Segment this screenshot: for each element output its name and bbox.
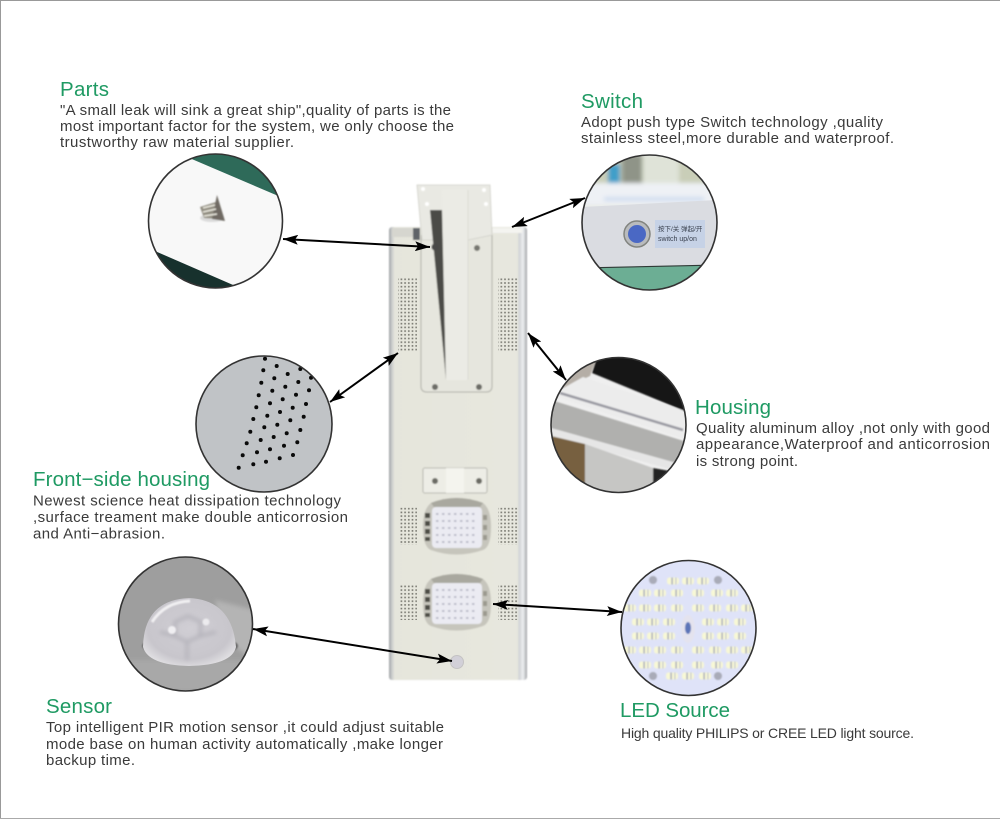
- text block: sensor: Sensor: [46, 695, 112, 718]
- arrow: switch: [512, 198, 585, 227]
- circle: front-side housing vent photo: [196, 356, 332, 492]
- text block: housing: [695, 396, 990, 470]
- text block: sensor: mode base on human activity automatically ,make longer: [46, 736, 443, 753]
- text block: switch: [581, 90, 894, 147]
- text block: housing: Housing: [695, 396, 771, 419]
- arrow: sensor: [253, 629, 452, 661]
- lamp body: [389, 227, 527, 680]
- circle: switch photo: switch up/on: [658, 236, 697, 243]
- text block: sensor: Top intelligent PIR motion sensor ,it could adjust suitable: [46, 719, 444, 736]
- text block: LED source: LED Source: [620, 699, 730, 722]
- solar street light product: [389, 185, 527, 680]
- text block: housing: Quality aluminum alloy ,not only with good: [696, 420, 990, 437]
- arrow: LED source: [493, 604, 622, 612]
- sensor dome: [450, 656, 464, 668]
- text block: parts: most important factor for the system, we only choose the: [60, 118, 454, 135]
- text block: sensor: backup time.: [46, 752, 135, 769]
- text block: LED source: [620, 699, 914, 741]
- text block: parts: trustworthy raw material supplier.: [60, 134, 294, 151]
- text block: front-side housing: Newest science heat dissipation technology: [33, 492, 342, 510]
- text block: sensor: [46, 695, 444, 769]
- circle: parts screw photo: [148, 154, 283, 288]
- text block: parts: Parts: [60, 78, 109, 101]
- text block: switch: Adopt push type Switch technology ,quality: [581, 114, 884, 131]
- text block: front-side housing: [33, 468, 348, 542]
- circle: PIR sensor photo: [118, 557, 254, 691]
- vent holes: [398, 277, 518, 620]
- circle: housing aluminium photo: [551, 357, 687, 493]
- circle: switch photo: 按下/关 弹起/开: [658, 224, 703, 233]
- circle: switch photo: [582, 155, 718, 291]
- arrow: front-side housing: [330, 353, 398, 402]
- text block: LED source: High quality PHILIPS or CREE LED light source.: [621, 725, 914, 741]
- text block: housing: is strong point.: [696, 453, 798, 470]
- text block: switch: stainless steel,more durable and waterproof.: [581, 130, 894, 147]
- text block: front-side housing: and Anti−abrasion.: [33, 526, 165, 542]
- lower mounting plate: [423, 468, 487, 493]
- text block: parts: [60, 78, 454, 151]
- text block: front-side housing: Front−side housing: [33, 468, 210, 491]
- text block: front-side housing: ,surface treament make double anticorrosion: [33, 509, 348, 526]
- text block: housing: appearance,Waterproof and anticorrosion: [696, 436, 990, 453]
- LED modules: [423, 498, 491, 630]
- arrow: housing: [528, 333, 566, 380]
- mounting panel and bracket: [417, 185, 492, 392]
- text block: switch: Switch: [581, 90, 643, 113]
- arrow: parts: [283, 239, 430, 247]
- text block: parts: "A small leak will sink a great ship",quality of parts is the: [60, 102, 451, 119]
- circle: LED source photo: [621, 560, 757, 696]
